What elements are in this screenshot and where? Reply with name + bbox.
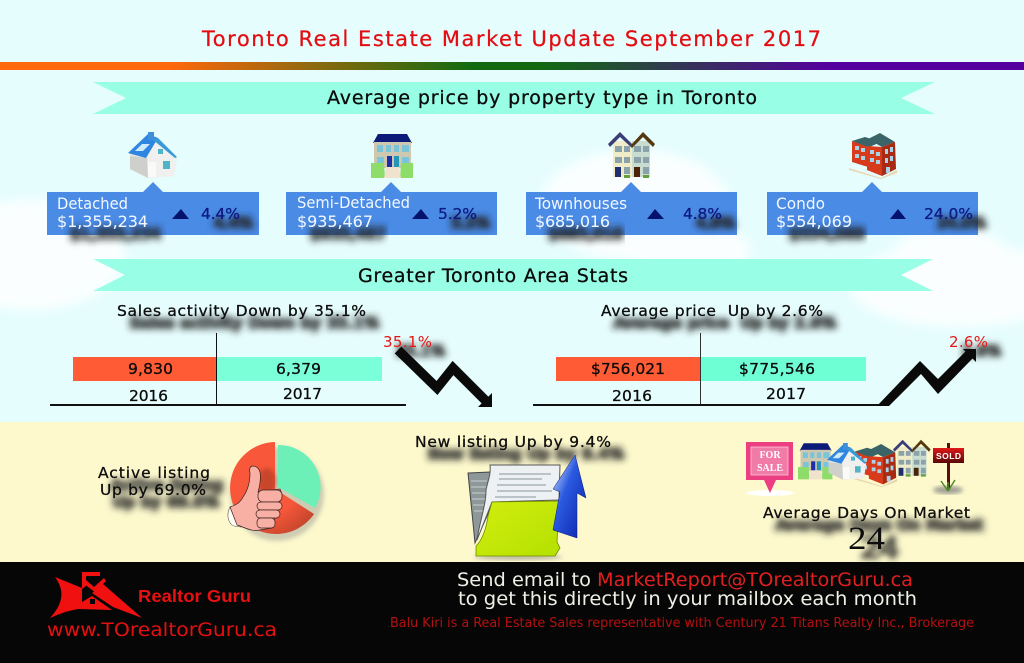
card: condo: Condo xyxy=(776,194,825,213)
icon: for sale sign: SALE xyxy=(757,463,783,474)
banner: average price heading: Average price by property type in Toronto xyxy=(327,87,757,109)
logo: Realtor Guru xyxy=(50,572,251,618)
chart: average price: Average price Up by 2.6% xyxy=(601,302,823,320)
card: townhouses xyxy=(526,182,737,235)
arrow: price up xyxy=(877,349,976,406)
card: townhouses: 4.8% xyxy=(683,205,722,223)
chart: average price: 2017 xyxy=(766,385,806,403)
card: detached: 4.4% xyxy=(201,205,240,223)
icon: detached house xyxy=(128,132,177,178)
chart: sales activity: Sales activity Down by 35.1% xyxy=(117,302,366,320)
logo: Realtor Guru: Realtor Guru xyxy=(138,586,251,606)
icon: townhouses small xyxy=(893,440,931,477)
card: condo xyxy=(767,182,978,235)
background clouds xyxy=(0,150,1024,327)
text: brokerage disclaimer: Balu Kiri is a Real Estate Sales representative with Century 21 Titans Realty Inc., Brokerage xyxy=(390,616,974,631)
section: average price by property type xyxy=(47,82,978,235)
icon: sold sign xyxy=(933,443,964,494)
title: Toronto Real Estate Market Update September 2017 xyxy=(201,27,821,51)
text: average days on market: Average Days On Market xyxy=(763,504,970,522)
icon: semi-detached house xyxy=(371,134,413,178)
icon: detached house small xyxy=(827,443,866,480)
card: semi-detached: 5.2% xyxy=(438,205,477,223)
banner: average price heading xyxy=(93,82,935,114)
icon: semi-detached house small xyxy=(798,443,832,479)
chart: average price: $775,546 xyxy=(739,360,815,378)
chart: sales activity: 6,379 xyxy=(276,360,321,378)
chart: average price: 2.6% xyxy=(949,333,988,351)
chart: sales activity: 2016 xyxy=(129,387,168,405)
chart: sales activity xyxy=(50,302,432,406)
panel: listings strip xyxy=(0,422,1024,562)
text: email call to action: to get this directly in your mailbox each month xyxy=(458,588,917,610)
chart: sales activity: 9,830 xyxy=(128,360,173,378)
text: email call to action xyxy=(457,569,917,610)
chart: average price: $756,021 xyxy=(591,360,665,378)
chart: sales activity: 2017 xyxy=(283,385,322,403)
card: semi-detached: Semi-Detached xyxy=(297,193,410,212)
text: active listing: Active listing xyxy=(98,464,210,482)
card: townhouses: Townhouses xyxy=(534,194,627,213)
card: detached xyxy=(47,182,259,235)
card: condo: 24.0% xyxy=(924,205,973,223)
text: website: www.TOrealtorGuru.ca xyxy=(47,619,277,641)
icon: condo building xyxy=(849,133,897,179)
banner: GTA stats heading xyxy=(93,259,933,291)
icon: for sale sign: FOR xyxy=(759,450,781,461)
text: email call to action: MarketReport@TOrealtorGuru.ca xyxy=(597,569,913,591)
icon: pie chart with thumbs up xyxy=(228,442,324,541)
text: new listing: New listing Up by 9.4% xyxy=(415,433,611,451)
icon: sold sign: SOLD xyxy=(936,451,961,461)
chart: sales activity: 35.1% xyxy=(383,333,432,351)
card: townhouses: $685,016 xyxy=(535,212,610,231)
number: 24 days: 24 xyxy=(848,521,885,557)
chart: average price: 2016 xyxy=(612,387,652,405)
text: active listing xyxy=(98,464,210,499)
icon: folder with up arrow xyxy=(468,455,586,560)
banner: GTA stats heading: Greater Toronto Area Stats xyxy=(358,265,628,287)
icon: for sale sign xyxy=(746,442,794,496)
gradient divider bar xyxy=(0,62,1024,70)
panel: footer xyxy=(0,562,1024,663)
section: greater toronto area stats xyxy=(50,259,988,407)
icon: townhouses xyxy=(608,132,655,178)
arrow: sales down xyxy=(398,350,492,407)
icon: condo small xyxy=(852,444,897,487)
text: active listing: Up by 69.0% xyxy=(100,481,206,499)
card: detached: Detached xyxy=(57,194,128,213)
chart: average price xyxy=(533,302,988,406)
card: semi-detached: $935,467 xyxy=(297,212,373,231)
card: semi-detached xyxy=(286,182,497,235)
card: detached: $1,355,234 xyxy=(57,212,148,231)
text: email call to action: Send email to xyxy=(457,569,591,591)
card: condo: $554,069 xyxy=(776,212,852,231)
